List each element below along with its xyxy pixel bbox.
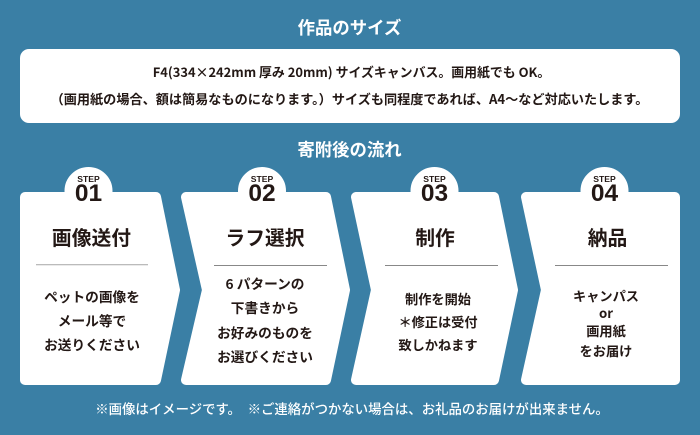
step 4 text: 画用紙: [586, 320, 626, 340]
step 4 text: キャンパス: [573, 286, 639, 304]
step 3 text: [398, 289, 478, 354]
step 2 text: お好みのものを: [217, 322, 313, 342]
step 3 badge: STEP: [423, 174, 446, 184]
step 4 text: or: [599, 303, 613, 322]
step 4 card shape: [526, 172, 675, 380]
step 2 badge: 02: [248, 180, 276, 207]
step 1 title: 画像送付: [52, 222, 131, 251]
heading: flow after donation: 寄附後の流れ: [297, 137, 402, 162]
step 1 text: お送りください: [44, 334, 140, 354]
step 2 text: お選びください: [217, 346, 313, 366]
step 1 text: [44, 286, 140, 354]
step 1 badge: STEP: [77, 174, 100, 184]
step 1 badge: 01: [75, 180, 102, 207]
step 4 text: [573, 286, 639, 360]
step 3 badge: 03: [421, 180, 448, 207]
step 4 badge: STEP: [593, 174, 616, 184]
step 2 card shape: [186, 172, 345, 380]
step 4 title: 納品: [588, 222, 627, 251]
step 2 badge: STEP: [251, 174, 273, 184]
step 3 text: 制作を開始: [405, 289, 471, 308]
heading: artwork size: 作品のサイズ: [298, 14, 401, 40]
panel: size description: [20, 49, 680, 123]
step 2 text: 下書きから: [231, 297, 299, 317]
step 2 text: 6 パターンの: [226, 272, 304, 292]
step 2 title: ラフ選択: [225, 222, 305, 251]
step 4 badge: 04: [591, 180, 618, 207]
text: size line 2: （画用紙の場合、額は簡易なものになります。）サイズも同程度であれば、A4～など対応いたします。: [51, 89, 648, 108]
footer note: ※画像はイメージです。 ※ご連絡がつかない場合は、お礼品のお届けが出来ません。: [95, 398, 609, 418]
step 3 text: 致しかねます: [398, 335, 478, 354]
step 1 text: メール等で: [58, 310, 126, 330]
step 4 text: をお届け: [580, 341, 632, 360]
step 3 card shape: [356, 172, 513, 380]
step 1 card shape: [25, 172, 175, 380]
step 3 title: 制作: [415, 222, 455, 251]
step 2 text: [217, 272, 313, 366]
step 3 text: ＊修正は受付: [398, 312, 478, 331]
text: size line 1: F4(334×242mm 厚み 20mm) サイズキャンバス。画用紙でも OK。: [153, 62, 550, 80]
step 1 text: ペットの画像を: [44, 286, 140, 306]
